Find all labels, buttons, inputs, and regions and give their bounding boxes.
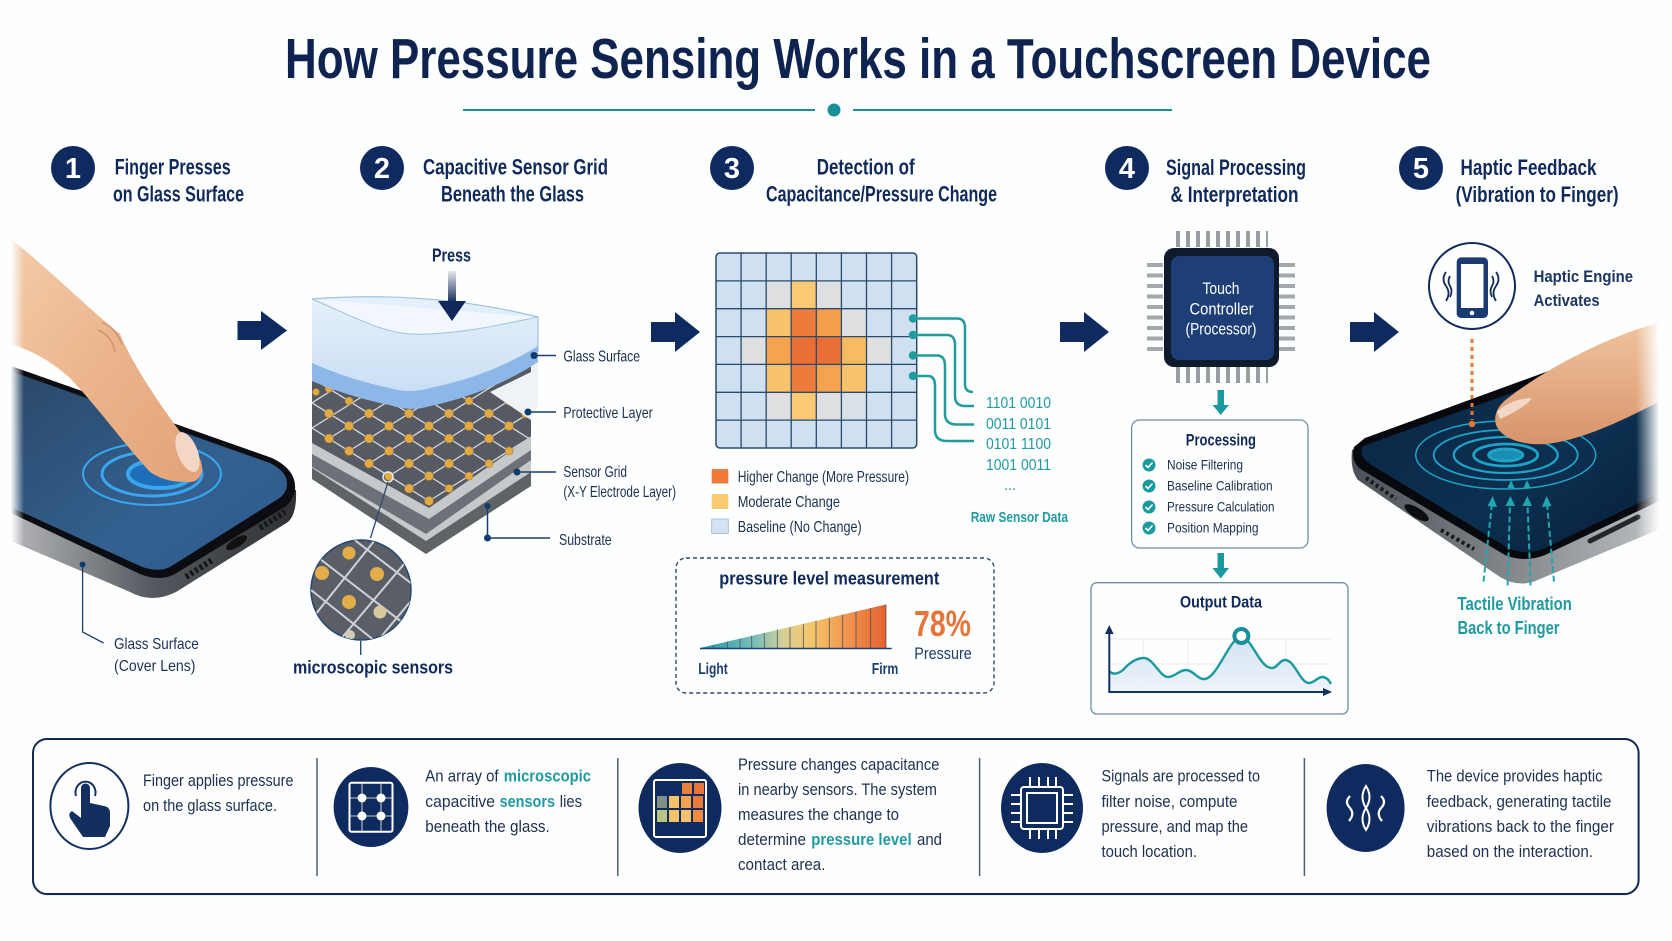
circuit traces to raw data [910,316,974,441]
text: step 5 summary: based on the interaction. [1427,842,1593,861]
icon: haptic engine phone [1429,243,1515,329]
callout: glass surface cover lens: (Cover Lens) [114,658,196,675]
icon: sensor array [334,767,408,847]
callout: glass surface cover lens [80,562,199,675]
text: step 1 summary [143,771,294,815]
text: step 3 summary: determine [738,830,806,849]
stack label: sensor grid: Sensor Grid [563,464,627,481]
touch controller chip: Controller [1190,300,1254,318]
stack label: sensor grid [514,464,676,501]
text: step 4 summary: pressure, and map the [1102,817,1248,836]
step 1 heading: Finger Presses [115,154,231,180]
glass layer [312,297,538,409]
raw sensor data: Raw Sensor Data [971,509,1069,526]
raw sensor data: 0011 0101 [986,416,1051,433]
checklist: Position Mapping [1167,520,1258,536]
arrow: step 3 to 4 [1060,312,1109,352]
panel: output data: Output Data [1180,593,1262,612]
finger on screen [1495,322,1662,444]
arrow: step 1 to 2 [238,311,287,350]
step 5 heading: 5 [1413,153,1429,185]
callout: glass surface cover lens: Glass Surface [114,636,199,653]
step 2 heading [360,146,608,206]
title divider [463,104,1172,116]
arrow: step 2 to 3 [651,312,700,352]
illustration: sensor stack layers [312,297,538,554]
panel: pressure level measurement: Pressure [914,644,972,663]
checklist [1142,456,1274,536]
sensor grid layer [312,357,531,508]
tactile vibration arrows [1484,480,1554,585]
arrow: chip to processing [1212,390,1229,415]
label: haptic engine activates [1534,267,1633,310]
arrow: processing to output [1212,553,1229,578]
step 1 heading [51,146,244,206]
raw sensor data: 1001 0011 [986,457,1051,474]
stack label: glass surface: Glass Surface [563,348,640,366]
label: tactile vibration: Tactile Vibration [1458,594,1572,614]
text: step 2 summary: lies [560,792,582,811]
haptic ripple rings [1416,421,1596,489]
stack label: substrate [484,503,612,549]
raw sensor data: ... [1004,477,1016,494]
touch controller chip: (Processor) [1186,320,1256,339]
label: haptic engine activates: Haptic Engine [1534,267,1633,286]
finger [11,239,202,482]
text: step 5 summary: vibrations back to the finger [1427,817,1614,836]
press label and arrow: Press [432,246,471,266]
stack label: protective layer: Protective Layer [563,405,653,422]
panel: pressure level measurement [676,558,994,693]
step 2 heading: Beneath the Glass [441,182,584,206]
panel: processing: Processing [1186,431,1256,450]
heatmap sensor grid [716,253,917,448]
raw sensor data: 1101 0010 [986,395,1051,412]
text: step 3 summary: pressure level [811,830,912,849]
touch ripple rings [83,443,221,505]
text: step 5 summary: feedback, generating tactile [1427,792,1611,811]
step 4 heading: & Interpretation [1170,182,1298,207]
text: step 2 summary: capacitive [425,792,495,811]
panel: pressure level measurement: 78% [914,603,971,644]
step 3 heading [710,146,997,206]
label: tactile vibration [1458,594,1572,638]
step 4 heading [1105,146,1306,207]
magnified microscopic sensors: microscopic sensors [293,658,453,678]
text: step 5 summary: The device provides haptic [1427,767,1603,786]
text: step 3 summary: and [917,830,942,849]
step 2 heading: Capacitive Sensor Grid [423,154,608,180]
step 3 heading: Capacitance/Pressure Change [766,182,997,206]
magnified microscopic sensors [293,472,453,678]
text: step 1 summary: on the glass surface. [143,796,277,815]
panel: pressure level measurement: Light [698,661,728,678]
raw sensor data [971,395,1069,526]
step 5 heading: (Vibration to Finger) [1456,182,1619,207]
pressure wedge gauge [700,604,892,648]
text: step 2 summary: microscopic [504,767,591,786]
heatmap legend: Higher Change (More Pressure) [738,469,909,486]
text: step 4 summary: touch location. [1102,842,1197,861]
checklist: Baseline Calibration [1167,478,1273,494]
text: step 5 summary [1427,767,1614,861]
panel: pressure level measurement: pressure level measurement [719,568,939,588]
panel: bottom summary [33,739,1639,896]
text: step 4 summary: Signals are processed to [1102,767,1260,786]
heatmap legend: Baseline (No Change) [738,519,862,536]
output line chart [1105,625,1332,696]
checklist: Noise Filtering [1167,456,1243,472]
checklist: Pressure Calculation [1167,498,1274,514]
icon: processor [1001,763,1083,853]
step 1 heading: on Glass Surface [113,182,244,206]
illustration: phone with haptic feedback [1352,310,1672,584]
icon: vibration waves [1327,764,1405,852]
text: step 2 summary: An array of [425,767,499,786]
icon: heatmap [638,763,722,853]
touch controller chip: Touch [1202,279,1240,298]
panel: pressure level measurement: Firm [872,661,898,678]
text: step 3 summary: contact area. [738,855,825,874]
stack label: substrate: Substrate [559,532,612,549]
panel: output data [1091,583,1348,714]
step 1 heading: 1 [65,153,81,185]
label: tactile vibration: Back to Finger [1458,618,1560,638]
step 5 heading [1399,146,1619,207]
text: step 4 summary [1102,767,1260,861]
label: haptic engine activates: Activates [1534,291,1600,310]
step 2 heading: 2 [374,153,390,185]
illustration: finger pressing phone [0,225,296,598]
dotted line from haptic engine [1469,339,1475,427]
text: step 2 summary: beneath the glass. [425,817,550,836]
icon: tapping hand [50,763,128,849]
step 4 heading: Signal Processing [1166,155,1306,180]
stack label: protective layer [524,405,653,422]
step 3 heading: 3 [724,153,740,185]
heatmap legend [712,469,909,536]
raw sensor data: 0101 1100 [986,436,1051,453]
press label and arrow [432,246,471,321]
heatmap legend: Moderate Change [738,494,840,511]
text: step 3 summary: measures the change to [738,805,899,824]
panel: processing [1132,420,1308,548]
step 5 heading: Haptic Feedback [1460,155,1597,180]
text: step 4 summary: filter noise, compute [1102,792,1238,811]
text: step 1 summary: Finger applies pressure [143,771,294,790]
text: step 3 summary: Pressure changes capacitance [738,755,939,774]
touch controller chip [1155,239,1287,375]
step 3 heading: Detection of [817,154,915,180]
text: step 3 summary: in nearby sensors. The system [738,780,937,799]
stack label: sensor grid: (X-Y Electrode Layer) [563,484,676,501]
arrow: step 4 to 5 [1350,312,1399,352]
text: step 3 summary [738,755,942,874]
step 4 heading: 4 [1119,153,1135,185]
stack label: glass surface [530,348,640,366]
text: step 2 summary: sensors [500,792,555,811]
text: step 2 summary [425,767,591,836]
